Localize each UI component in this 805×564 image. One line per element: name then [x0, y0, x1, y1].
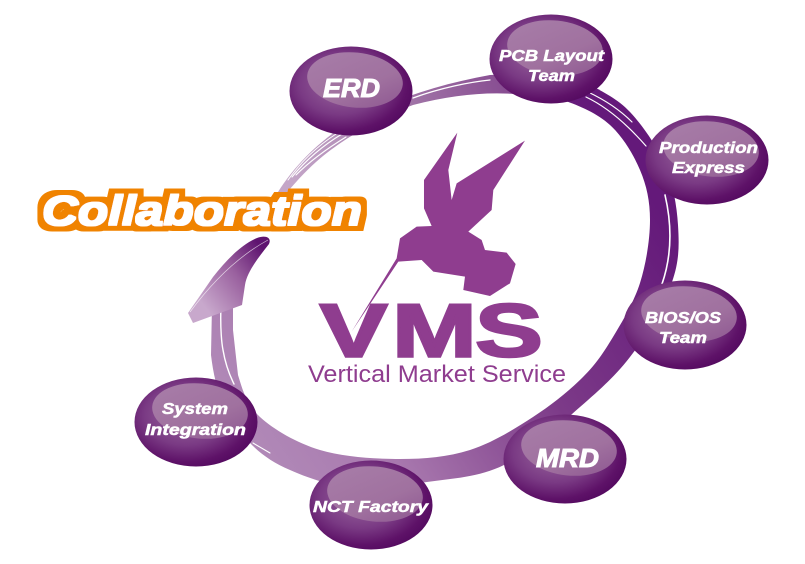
ring: main arc with right, bottom and left sweep — [211, 85, 679, 488]
node: BIOS/OS Team — [624, 280, 746, 370]
node: PCB Layout Team: Team — [528, 68, 575, 85]
node: ERD — [290, 46, 412, 136]
node: Production Express — [646, 116, 768, 204]
node: NCT Factory: NCT Factory — [313, 499, 430, 516]
node: MRD — [504, 414, 626, 504]
icon: hummingbird — [352, 133, 525, 332]
ring highlights — [208, 80, 670, 453]
node: BIOS/OS Team: Team — [659, 330, 707, 347]
logo subtitle: Vertical Market Service — [308, 361, 566, 388]
node: PCB Layout Team — [490, 14, 612, 104]
node: Production Express: Express — [672, 160, 745, 177]
arrowhead of cycle — [188, 237, 270, 323]
node: Production Express: Production — [659, 140, 758, 157]
node: BIOS/OS Team: BIOS/OS — [645, 310, 722, 327]
node: System Integration — [134, 378, 258, 466]
node: NCT Factory — [310, 460, 432, 550]
node: PCB Layout Team: PCB Layout — [499, 48, 605, 65]
node: System Integration: Integration — [145, 422, 246, 439]
node: MRD: MRD — [536, 443, 599, 473]
node: System Integration: System — [162, 401, 228, 418]
node: ERD: ERD — [323, 73, 380, 103]
title: Collaboration: Collaboration — [42, 187, 362, 234]
logo: VMS: VMS — [320, 289, 543, 373]
ring: top arc from Collaboration to PCB — [278, 72, 600, 195]
